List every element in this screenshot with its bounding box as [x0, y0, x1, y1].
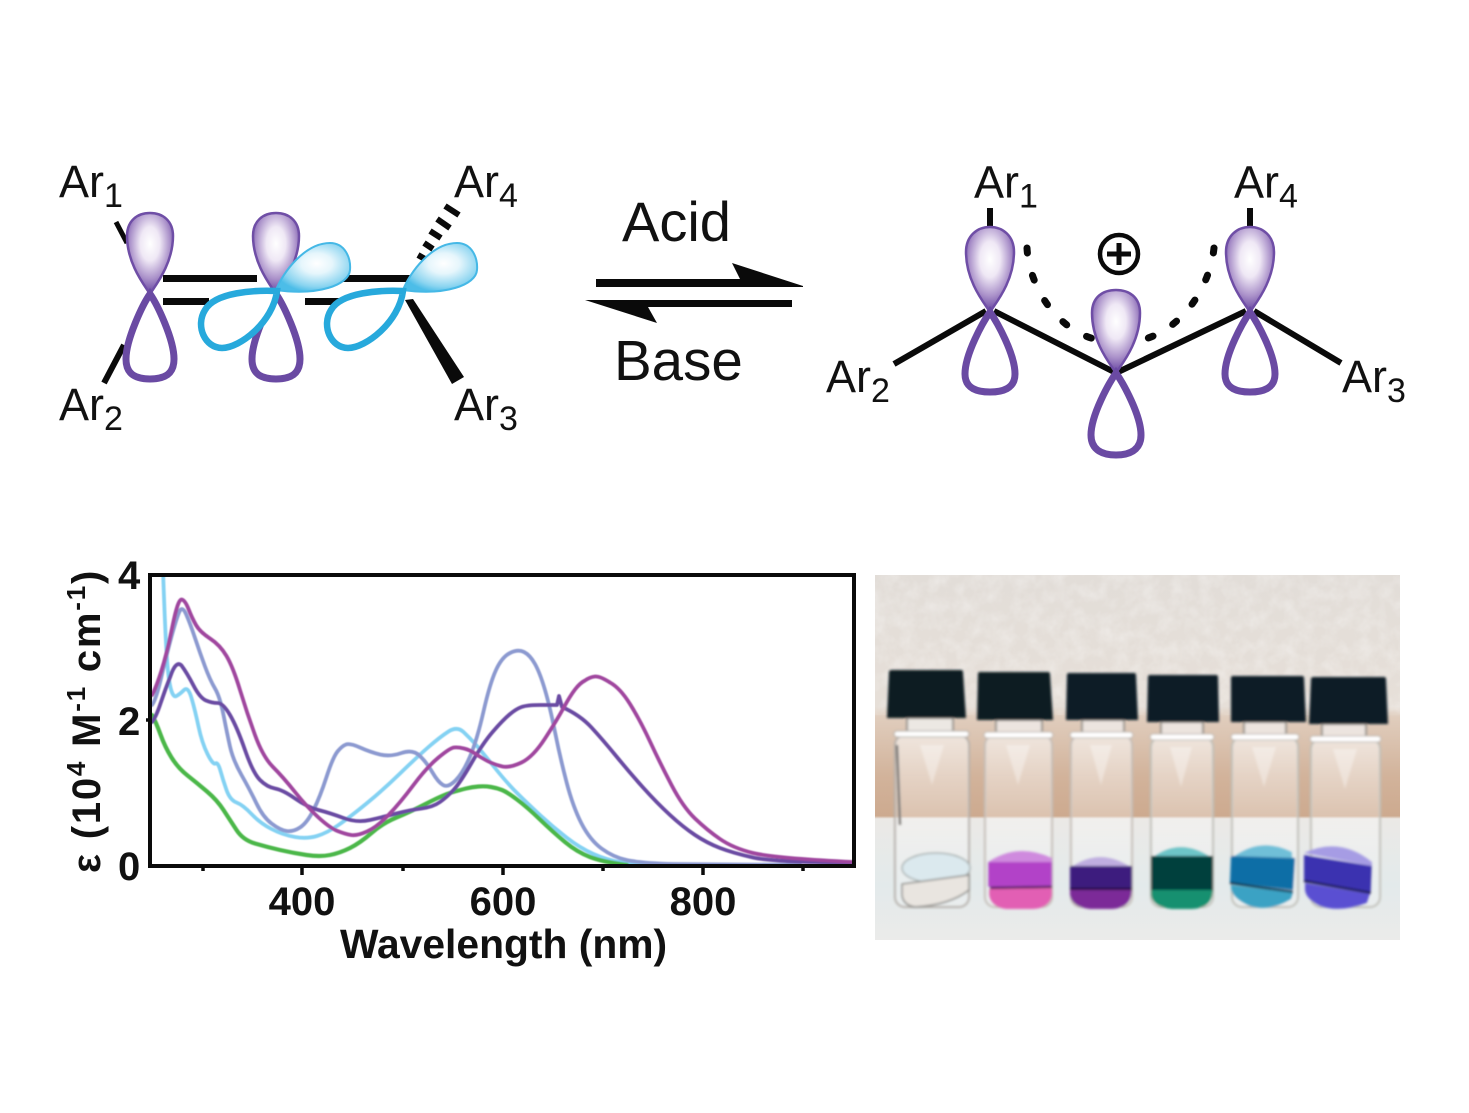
label: Ar3: 3	[1387, 372, 1406, 410]
wall texture	[875, 575, 1400, 715]
curve: green	[152, 715, 627, 865]
bond to Ar1	[116, 222, 127, 243]
label: Ar1: Ar	[974, 156, 1019, 208]
y axis title: )	[65, 569, 109, 584]
label: Ar1: 1	[1019, 178, 1038, 216]
arrow: reverse	[585, 300, 792, 323]
axes frame	[150, 575, 854, 866]
y axis title: ε (10	[65, 776, 109, 873]
vial 1: colourless	[887, 670, 970, 907]
orbital: left p orbital	[965, 227, 1015, 392]
label: Ar2: Ar	[826, 351, 871, 402]
dashed delocalization arc, right	[1142, 248, 1214, 340]
x tick labels	[269, 880, 736, 924]
orbital: purple p orbital 2	[252, 213, 300, 379]
label: Ar4: 4	[1279, 178, 1298, 216]
label: Acid: Acid	[622, 190, 731, 253]
label: Ar3: 3	[499, 400, 518, 438]
vial 4: green	[1147, 675, 1219, 909]
panel: photo of six vials	[875, 575, 1400, 940]
orbital: centre p orbital	[1091, 290, 1141, 455]
y axis title: -1	[61, 685, 91, 712]
x axis title: Wavelength (nm)	[340, 921, 667, 967]
label: Ar2: 2	[104, 400, 123, 438]
label: Ar3: Ar	[1342, 351, 1387, 402]
vial 3: purple	[1066, 673, 1138, 909]
hashed bond to Ar4	[418, 206, 459, 259]
curve: purple	[152, 664, 853, 863]
y tick labels: 0	[118, 845, 140, 889]
x tick labels: 400	[269, 880, 335, 924]
panel: bent cation structure	[826, 156, 1406, 455]
curve: magenta	[152, 599, 853, 862]
chart: absorption spectra	[61, 554, 854, 967]
panel: planar neutral structure	[59, 156, 518, 438]
axis ticks	[146, 648, 803, 875]
y tick labels: 4	[118, 554, 141, 598]
dashed delocalization arc, left	[1027, 248, 1098, 340]
photo background	[875, 575, 1400, 940]
curve: periwinkle	[152, 609, 800, 865]
panel: acid/base equilibrium	[585, 190, 803, 392]
label: Ar3: Ar	[454, 379, 499, 430]
orbital: blue p orbital 1	[201, 243, 350, 348]
orbital: purple p orbital 1	[126, 213, 174, 379]
label: Ar4: 4	[499, 177, 518, 215]
orbital: right p orbital	[1225, 227, 1275, 392]
label: Ar1: 1	[104, 177, 123, 215]
y tick labels	[118, 554, 141, 889]
double bond lines	[163, 275, 410, 305]
vial 2: magenta	[977, 672, 1053, 909]
x tick labels: 800	[670, 880, 736, 924]
orbital: blue p orbital 2	[327, 243, 477, 348]
x tick labels: 600	[470, 880, 536, 924]
icon: positive charge	[1100, 235, 1138, 273]
y axis title: 4	[61, 760, 91, 776]
y axis title: M	[65, 712, 109, 760]
label: Base: Base	[614, 329, 743, 392]
label: Ar4: Ar	[1234, 156, 1279, 208]
y axis title: -1	[61, 584, 91, 611]
label: Ar2: 2	[871, 372, 890, 410]
vial 6: indigo	[1304, 677, 1388, 909]
vial 5: teal blue	[1230, 676, 1306, 908]
bonds	[894, 208, 1341, 373]
y axis title: cm	[65, 611, 109, 685]
arrow: forward	[596, 263, 803, 287]
curve: light blue	[160, 577, 649, 864]
label: Ar4: Ar	[454, 156, 499, 207]
label: Ar1: Ar	[59, 156, 104, 207]
plot curves	[152, 570, 853, 865]
y tick labels: 2	[118, 700, 140, 744]
label: Ar2: Ar	[59, 379, 104, 430]
wedge bond to Ar3	[405, 299, 464, 384]
bond to Ar2	[104, 345, 124, 383]
